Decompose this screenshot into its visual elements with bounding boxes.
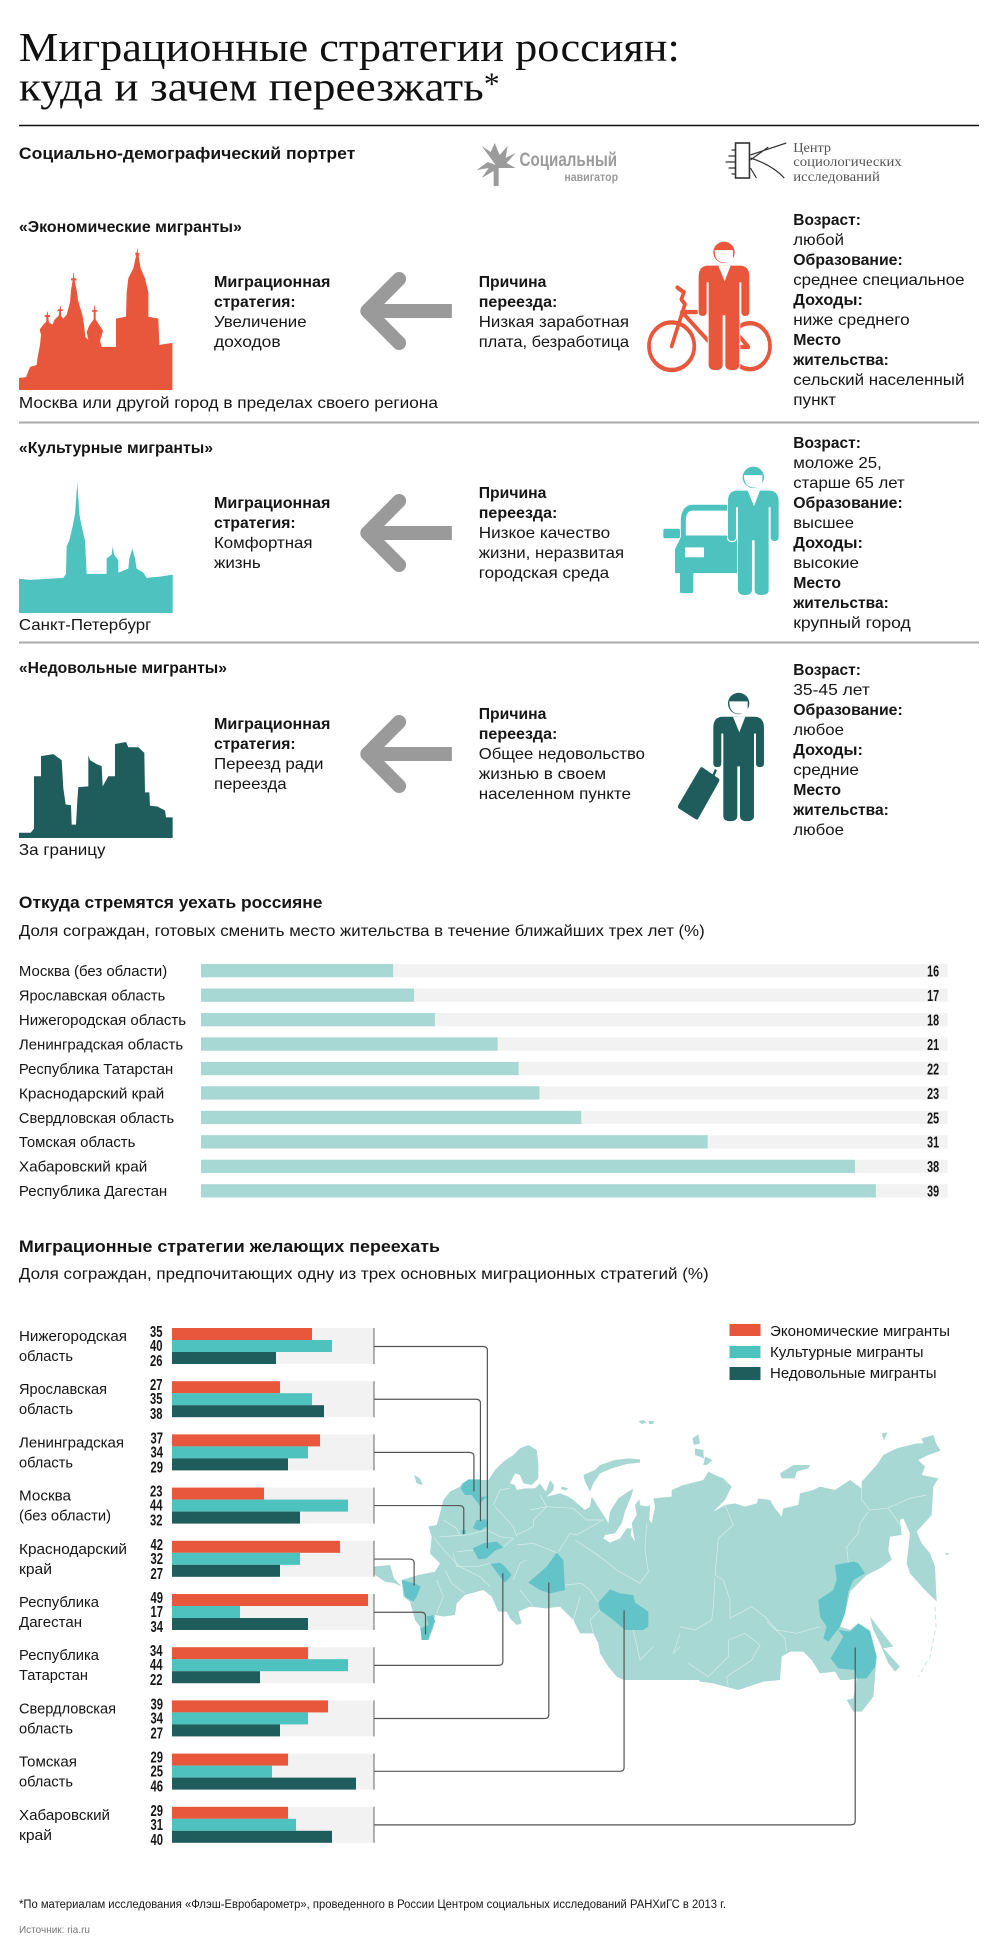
text: reason for moving: Причина xyxy=(479,274,547,291)
region labels: Москва (без области) xyxy=(19,964,167,980)
arrow xyxy=(367,722,452,786)
map region: Amur area xyxy=(818,1562,865,1642)
logo: centre for sociological research: социологических xyxy=(793,154,902,169)
region labels xyxy=(19,964,186,1200)
row: Tomsk oblast: Томская xyxy=(19,1755,77,1771)
row: Sverdlovsk oblast: Свердловская xyxy=(19,1701,116,1717)
row: Nizhny Novgorod oblast xyxy=(19,1324,374,1370)
row: Yaroslavl oblast: область xyxy=(19,1402,73,1418)
heading: where Russians want to leave from: Откуда стремятся уехать россияне xyxy=(19,893,322,912)
region labels: Хабаровский край xyxy=(19,1160,147,1176)
bar values: 25 xyxy=(927,1110,939,1127)
row: Yaroslavl oblast: 27 xyxy=(150,1377,162,1394)
text: demographic profile: Образование: xyxy=(793,252,903,269)
text: demographic profile: жительства: xyxy=(792,595,889,612)
text: demographic profile: высшее xyxy=(793,515,854,532)
logo: social navigator: навигатор xyxy=(564,170,618,184)
logo: social navigator: Социальный xyxy=(520,150,617,171)
region labels: Краснодарский край xyxy=(19,1086,164,1102)
text: demographic profile: любой xyxy=(793,232,844,249)
row: Krasnodar krai: 27 xyxy=(150,1566,163,1583)
text: reason for moving: Причина xyxy=(479,706,547,723)
row: Krasnodar krai: Краснодарский xyxy=(19,1542,127,1558)
text: demographic profile: Место xyxy=(793,332,841,349)
row: Khabarovsk krai: 29 xyxy=(150,1803,163,1820)
map region: Leningrad oblast xyxy=(461,1479,487,1506)
row: Tomsk oblast: 25 xyxy=(150,1764,163,1781)
text: reason for moving xyxy=(479,274,629,351)
row: Khabarovsk krai xyxy=(19,1803,374,1849)
text: demographic profile: Возраст: xyxy=(793,435,861,452)
connector lines from chart rows to map regions xyxy=(373,1346,855,1825)
text: migration strategy: переезда xyxy=(214,776,287,793)
text: demographic profile: Место xyxy=(793,575,841,592)
icon: foreign skyline xyxy=(19,742,173,838)
row: Dagestan: 34 xyxy=(150,1619,163,1636)
text: reason for moving xyxy=(479,485,624,582)
text: demographic profile: любое xyxy=(793,822,844,839)
logo: centre for sociological research xyxy=(726,140,902,184)
row: Nizhny Novgorod oblast: область xyxy=(19,1349,73,1365)
grouped bar chart: strategies by region xyxy=(19,1324,374,1849)
text: demographic profile: Возраст: xyxy=(793,212,861,229)
text: demographic profile: моложе 25, xyxy=(793,455,882,472)
row: Krasnodar krai: край xyxy=(19,1562,52,1578)
text: reason for moving: жизни, неразвитая xyxy=(479,545,624,562)
icon: person with suitcase xyxy=(680,693,764,821)
bar chart: desire to leave by region xyxy=(19,963,948,1201)
source: Источник: ria.ru xyxy=(19,1924,90,1936)
bar values xyxy=(927,963,939,1201)
panel: economic migrants xyxy=(19,212,965,412)
text: demographic profile: Образование: xyxy=(793,495,903,512)
row: Khabarovsk krai: Хабаровский xyxy=(19,1808,110,1824)
text: demographic profile: 35-45 лет xyxy=(793,682,871,699)
region labels: Нижегородская область xyxy=(19,1013,186,1029)
text: reason for moving: населенном пункте xyxy=(479,786,631,803)
row: Sverdlovsk oblast xyxy=(19,1696,374,1742)
icon: person with bicycle xyxy=(649,242,770,370)
row: Tatarstan: 22 xyxy=(150,1672,162,1689)
map region: Yaroslavl oblast xyxy=(473,1519,487,1531)
row: Leningrad oblast xyxy=(19,1430,374,1476)
row: Sverdlovsk oblast: область xyxy=(19,1721,73,1737)
text: demographic profile xyxy=(792,435,911,632)
text: reason for moving: переезда: xyxy=(479,726,557,743)
row: Leningrad oblast: 37 xyxy=(150,1430,163,1447)
row: Dagestan: 17 xyxy=(150,1604,163,1621)
label: destination Saint Petersburg: Санкт-Петербург xyxy=(19,617,151,634)
text: migration strategy: Миграционная xyxy=(214,495,330,512)
text: migration strategy: доходов xyxy=(214,334,281,351)
row: Moscow: 32 xyxy=(150,1513,162,1530)
row: Sverdlovsk oblast: 39 xyxy=(150,1696,163,1713)
arrow xyxy=(367,501,452,565)
text: reason for moving: переезда: xyxy=(479,505,557,522)
label: destination abroad: За границу xyxy=(19,842,106,859)
map region: Tomsk oblast xyxy=(598,1589,648,1630)
row: Tomsk oblast xyxy=(19,1750,374,1796)
text: migration strategy: Комфортная xyxy=(214,535,313,552)
region labels: Республика Дагестан xyxy=(19,1184,167,1200)
row: Yaroslavl oblast: Ярославская xyxy=(19,1382,107,1398)
text: demographic profile: жительства: xyxy=(792,802,889,819)
text: migration strategy: стратегия: xyxy=(214,294,296,311)
map region: Sverdlovsk oblast xyxy=(528,1553,565,1593)
text: demographic profile: крупный город xyxy=(793,615,911,632)
row: Dagestan xyxy=(19,1590,374,1636)
row: Moscow: Москва xyxy=(19,1489,72,1505)
text: migration strategy xyxy=(214,274,330,351)
text: migration strategy: жизнь xyxy=(214,555,261,572)
row: Nizhny Novgorod oblast: 40 xyxy=(150,1338,162,1355)
row: Nizhny Novgorod oblast: Нижегородская xyxy=(19,1329,127,1345)
footnote: *По материалам исследования «Флэш-Евробарометр», проведенного в России Центром социальных исследований РАНХиГС в 2013 г. xyxy=(19,1899,726,1911)
row: Leningrad oblast: 34 xyxy=(150,1444,163,1461)
row: Leningrad oblast: область xyxy=(19,1455,73,1471)
row: Dagestan: Республика xyxy=(19,1595,100,1611)
text: migration strategy: стратегия: xyxy=(214,736,296,753)
legend: Экономические мигранты xyxy=(770,1324,950,1340)
title xyxy=(19,25,680,110)
row: Yaroslavl oblast xyxy=(19,1377,374,1423)
bar values: 22 xyxy=(927,1061,939,1078)
heading: dissatisfied migrants: «Недовольные мигранты» xyxy=(19,660,227,677)
text: migration strategy: Миграционная xyxy=(214,274,330,291)
row: Tatarstan: 44 xyxy=(150,1657,163,1674)
row: Tomsk oblast: область xyxy=(19,1775,73,1791)
heading: economic migrants: «Экономические мигранты» xyxy=(19,219,242,236)
text: migration strategy: стратегия: xyxy=(214,515,296,532)
text: demographic profile: Образование: xyxy=(793,702,903,719)
row: Leningrad oblast: 29 xyxy=(150,1459,163,1476)
title: куда и зачем переезжать xyxy=(19,64,484,110)
icon: Moscow skyline xyxy=(19,247,172,390)
subheading: share of citizens preferring a strategy: Доля сограждан, предпочитающих одну из трех основных миграционных стратегий (%) xyxy=(19,1266,709,1283)
text: demographic profile: жительства: xyxy=(792,352,889,369)
row: Tomsk oblast: 46 xyxy=(150,1779,163,1796)
row: Moscow: (без области) xyxy=(19,1509,111,1525)
arrow xyxy=(367,279,452,343)
text: demographic profile: средние xyxy=(793,762,859,779)
text: demographic profile: Доходы: xyxy=(793,292,863,309)
row: Yaroslavl oblast: 38 xyxy=(150,1406,163,1423)
text: reason for moving xyxy=(479,706,645,803)
logo: centre for sociological research: Центр xyxy=(793,140,831,155)
row: Dagestan: 49 xyxy=(150,1590,163,1607)
text: demographic profile: среднее специальное xyxy=(793,272,965,289)
text: reason for moving: переезда: xyxy=(479,294,557,311)
row: Sverdlovsk oblast: 34 xyxy=(150,1710,163,1727)
map region: Dagestan xyxy=(421,1615,435,1640)
row: Dagestan: Дагестан xyxy=(19,1615,82,1631)
label: destination Moscow: Москва или другой город в пределах своего региона xyxy=(19,395,438,412)
region labels: Свердловская область xyxy=(19,1111,174,1127)
row: Tatarstan: 34 xyxy=(150,1643,163,1660)
row: Khabarovsk krai: край xyxy=(19,1828,52,1844)
heading: migration strategies of those wishing to move: Миграционные стратегии желающих переехать xyxy=(19,1237,440,1256)
map: western part xyxy=(373,1420,700,1680)
text: migration strategy xyxy=(214,716,330,793)
region labels: Ярославская область xyxy=(19,988,165,1005)
text: demographic profile: сельский населенный xyxy=(793,372,964,389)
text: demographic profile: старше 65 лет xyxy=(793,475,905,492)
row: Krasnodar krai xyxy=(19,1537,374,1583)
map region: Tatarstan xyxy=(491,1563,512,1583)
bar values: 18 xyxy=(927,1012,939,1030)
icon: Saint Petersburg skyline xyxy=(19,482,173,613)
row: Moscow: 44 xyxy=(150,1498,163,1515)
row: Tatarstan: Татарстан xyxy=(19,1668,88,1684)
text: demographic profile: Доходы: xyxy=(793,535,863,552)
text: migration strategy: Увеличение xyxy=(214,314,307,331)
row: Tomsk oblast: 29 xyxy=(150,1750,163,1767)
text: reason for moving: Причина xyxy=(479,485,547,502)
text: demographic profile: Доходы: xyxy=(793,742,863,759)
logo: social navigator xyxy=(477,143,618,186)
bar values: 16 xyxy=(927,963,939,981)
region labels: Ленинградская область xyxy=(19,1037,183,1053)
map region: Nizhny Novgorod oblast xyxy=(473,1542,503,1559)
map region: Moscow xyxy=(462,1530,466,1534)
panel: dissatisfied migrants xyxy=(19,660,903,859)
title: * xyxy=(484,66,500,102)
row: Moscow: 23 xyxy=(150,1484,163,1501)
text: reason for moving: плата, безработица xyxy=(479,334,629,351)
text: demographic profile: Возраст: xyxy=(793,662,861,679)
text: reason for moving: Низкая заработная xyxy=(479,314,629,331)
row: Khabarovsk krai: 40 xyxy=(150,1832,163,1849)
row: Tatarstan: Республика xyxy=(19,1648,100,1664)
map: eastern part xyxy=(680,1432,950,1712)
subheading: share of citizens ready to move: Доля сограждан, готовых сменить место жительства в течение ближайших трех лет (%) xyxy=(19,923,705,940)
text: demographic profile: пункт xyxy=(793,392,837,409)
text: demographic profile: любое xyxy=(793,722,844,739)
row: Leningrad oblast: Ленинградская xyxy=(19,1435,124,1451)
map region: Khabarovsk krai xyxy=(831,1623,877,1678)
region labels: Томская область xyxy=(19,1135,135,1151)
heading: socio-demographic portrait: Социально-демографический портрет xyxy=(19,144,355,163)
bar values: 23 xyxy=(927,1086,939,1103)
bar values: 38 xyxy=(927,1159,939,1176)
map of Russia xyxy=(373,1420,950,1712)
text: reason for moving: Общее недовольство xyxy=(479,746,645,763)
text: migration strategy: Переезд ради xyxy=(214,756,323,773)
row: Yaroslavl oblast: 35 xyxy=(150,1391,163,1408)
row: Nizhny Novgorod oblast: 35 xyxy=(150,1324,163,1341)
legend xyxy=(730,1324,950,1382)
text: demographic profile xyxy=(792,212,965,409)
row: Nizhny Novgorod oblast: 26 xyxy=(150,1353,163,1370)
row: Krasnodar krai: 42 xyxy=(150,1537,163,1554)
row: Khabarovsk krai: 31 xyxy=(150,1817,163,1834)
row: Sverdlovsk oblast: 27 xyxy=(150,1725,163,1742)
heading: cultural migrants: «Культурные мигранты» xyxy=(19,440,213,457)
row: Moscow xyxy=(19,1484,374,1530)
region labels: Республика Татарстан xyxy=(19,1062,173,1078)
panel: cultural migrants xyxy=(19,435,911,634)
text: demographic profile: ниже среднего xyxy=(793,312,910,329)
bar values: 31 xyxy=(927,1135,939,1152)
text: reason for moving: Низкое качество xyxy=(479,525,610,542)
logo: centre for sociological research: исследований xyxy=(793,169,880,184)
bar values: 21 xyxy=(927,1037,939,1054)
text: demographic profile xyxy=(792,662,903,839)
bar values: 39 xyxy=(927,1184,939,1201)
text: demographic profile: Место xyxy=(793,782,841,799)
bar values: 17 xyxy=(927,988,939,1005)
title: Миграционные стратегии россиян: xyxy=(19,25,680,70)
text: reason for moving: жизнью в своем xyxy=(479,766,606,783)
legend: Недовольные мигранты xyxy=(770,1366,936,1382)
map region: Krasnodar krai xyxy=(402,1580,421,1602)
row: Krasnodar krai: 32 xyxy=(150,1551,163,1568)
text: migration strategy xyxy=(214,495,330,572)
text: reason for moving: городская среда xyxy=(479,565,609,582)
text: demographic profile: высокие xyxy=(793,555,859,572)
legend: Культурные мигранты xyxy=(770,1345,924,1361)
icon: person with car xyxy=(663,467,779,595)
row: Tatarstan xyxy=(19,1643,374,1689)
text: migration strategy: Миграционная xyxy=(214,716,330,733)
